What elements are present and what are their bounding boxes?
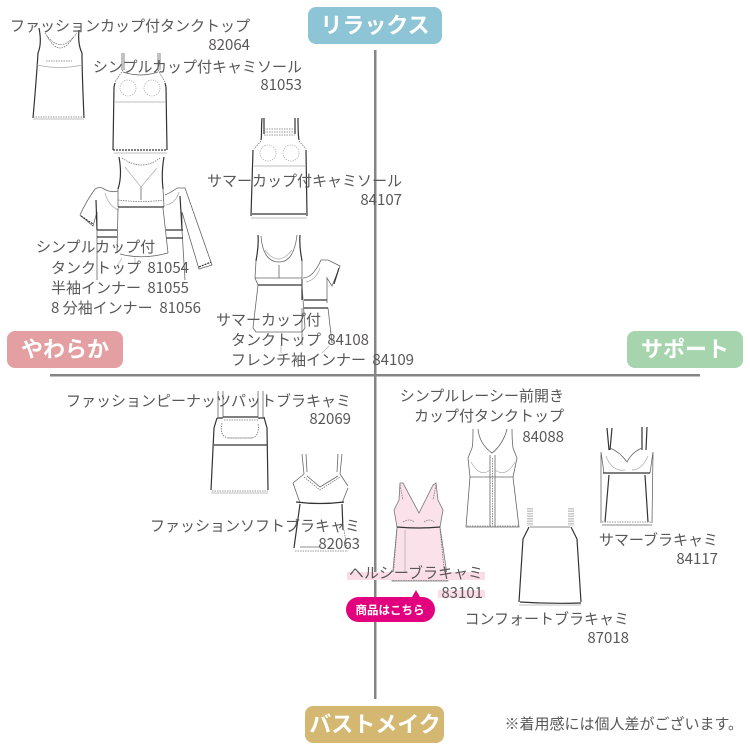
label: 84108 84109 <box>216 309 414 370</box>
label: 82063 <box>150 515 360 554</box>
horizontal axis <box>50 374 700 376</box>
label: 84108 84109: フレンチ袖インナー <box>231 349 366 370</box>
label: 81054 81055 81056: 81056 <box>159 297 201 318</box>
label: 81053: シンプルカップ付キャミソール <box>93 56 302 77</box>
label: 82069 <box>66 390 351 429</box>
long sleeve inner 81056 <box>165 188 212 280</box>
label: 81053 <box>93 56 302 95</box>
label: 82069: ファッションピーナッツパットブラキャミ <box>66 390 351 411</box>
label: 84108 84109: 84109 <box>372 349 414 370</box>
label: 87018 <box>464 608 629 648</box>
badge: サポート <box>627 331 743 368</box>
badge: リラックス: リラックス <box>320 8 430 40</box>
label: 83101 <box>349 562 483 603</box>
label: 81054 81055 81056 <box>36 236 201 318</box>
label: 83101: 83101 <box>441 582 483 603</box>
label: 81054 81055 81056: 半袖インナー <box>51 277 141 298</box>
label: 84088 <box>400 385 564 447</box>
note: ※着用感には個人差がございます。 <box>504 713 743 734</box>
label: 81054 81055 81056: タンクトップ <box>51 257 141 278</box>
label: 83101: ヘルシーブラキャミ <box>349 562 483 583</box>
label: 82064: ファッションカップ付タンクトップ <box>10 15 250 36</box>
garment: 87018 comfort bra camisole <box>519 508 581 605</box>
label: 81054 81055 81056: 81054 <box>147 257 189 278</box>
label: 87018: コンフォートブラキャミ <box>464 608 629 629</box>
highlight behind 83101 label <box>347 572 485 598</box>
French sleeve inner 84109 <box>302 260 340 345</box>
label: 84117 <box>599 529 718 569</box>
label: 84107: 84107 <box>360 189 402 210</box>
button: 商品はこちら: 商品はこちら <box>356 602 424 618</box>
tank top 81054 <box>118 157 164 189</box>
garments: 81054 tank top, 81055 half sleeve and 81056 long sleeve inners <box>80 157 212 280</box>
garment: 82063 soft bra camisole <box>293 454 348 551</box>
garment: 82069 peanut pad bra camisole <box>211 391 268 493</box>
half sleeve inner 81055 <box>80 188 118 280</box>
garment: 84088 lacy front-open tank top <box>466 429 519 527</box>
badge: サポート: サポート <box>641 332 729 364</box>
label: 84108 84109: 84108 <box>327 329 369 350</box>
label: 84117: 84117 <box>676 548 718 569</box>
garment: 84107 summer cup camisole <box>251 118 307 218</box>
label: 82069: 82069 <box>309 408 351 429</box>
label: 84088: 84088 <box>522 426 564 447</box>
garment: 84117 summer bra camisole <box>601 427 653 525</box>
label: 81054 81055 81056: シンプルカップ付 <box>36 236 155 257</box>
label: 81054 81055 81056: 8 分袖インナー <box>51 297 153 318</box>
label: 81054 81055 81056: 81055 <box>147 277 189 298</box>
label: 84107: サマーカップ付キャミソール <box>207 170 402 191</box>
garment: 83101 healthy bra camisole (highlighted pink) <box>392 483 448 581</box>
badge: バストメイク: バストメイク <box>309 707 441 739</box>
label: 84088: シンプルレーシー前開き <box>400 385 564 406</box>
button: 商品はこちら <box>346 590 435 622</box>
label: 84108 84109: サマーカップ付 <box>216 309 321 330</box>
label: 87018: 87018 <box>587 627 629 648</box>
garment: 81053 simple cup camisole <box>113 53 167 153</box>
label: 81053: 81053 <box>260 74 302 95</box>
tank top 84108 <box>256 235 302 285</box>
label: 82064: 82064 <box>208 34 250 55</box>
label: 82064 <box>10 15 250 55</box>
garment: 82064 fashion cup tank top <box>33 28 84 119</box>
label: 84108 84109: タンクトップ <box>231 329 321 350</box>
label: 82063: 82063 <box>318 533 360 554</box>
label: 84107 <box>207 170 402 210</box>
garments: 84108 tank top and 84109 French sleeve inner <box>253 235 340 353</box>
badge: やわらか <box>7 331 123 368</box>
label: 84117: サマーブラキャミ <box>599 529 718 550</box>
label: 82063: ファッションソフトブラキャミ <box>150 515 360 536</box>
badge: やわらか: やわらか <box>21 332 109 364</box>
vertical axis <box>374 50 376 699</box>
label: 84088: カップ付タンクトップ <box>414 405 564 426</box>
